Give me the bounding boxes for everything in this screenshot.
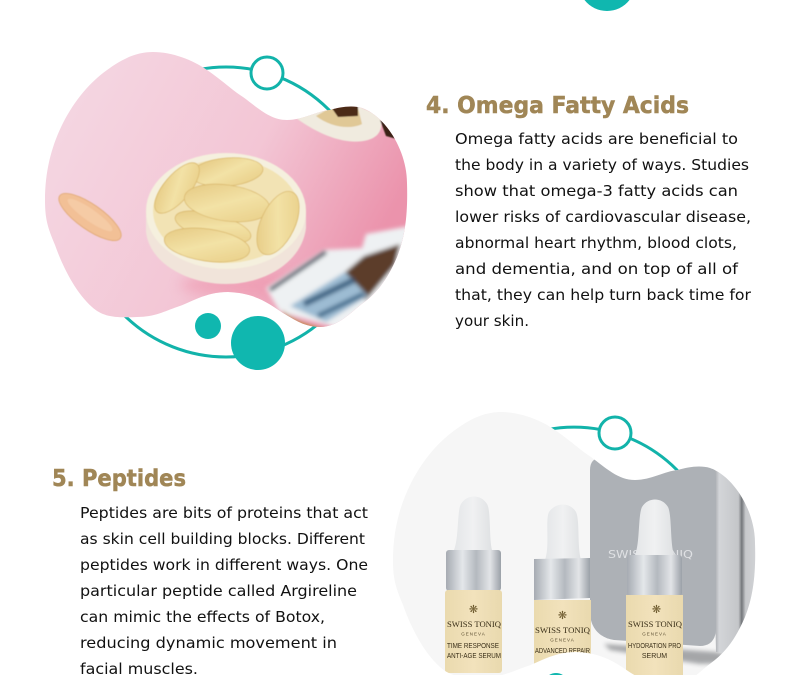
- bottle three: GENEVA: [642, 632, 667, 636]
- small teal dot: [195, 313, 221, 339]
- metal tin: SWISS TONIQ: [608, 548, 693, 561]
- body text: omega fatty acids: show that omega-3 fatty acids can: [455, 182, 738, 200]
- decorative ring behind photo: [429, 427, 719, 572]
- body text: omega fatty acids: [455, 130, 752, 330]
- body text: peptides: [80, 504, 368, 675]
- body text: omega fatty acids: and dementia, and on top of all of: [455, 260, 739, 278]
- body text: omega fatty acids: the body in a variety of ways. Studies: [455, 156, 749, 174]
- body text: omega fatty acids: lower risks of cardiovascular disease,: [455, 208, 751, 226]
- blurred bottle at lower right: [266, 226, 410, 332]
- metal tin: [590, 458, 760, 664]
- small teal dot: [549, 673, 563, 675]
- body text: peptides: can mimic the effects of Botox,: [80, 608, 325, 626]
- bottle one: ANTI-AGE SERUM: [447, 653, 501, 660]
- bottle three: HYDORATION PRO: [628, 643, 681, 650]
- small ring node: [599, 417, 631, 449]
- bottle three: SERUM: [642, 653, 667, 660]
- section 5 image: serum bottles in teal-ringed blob: [385, 405, 765, 675]
- lone capsule on the left: [58, 192, 122, 242]
- bottle three: ❋: [652, 603, 661, 616]
- section 4 image: omega capsules in teal-ringed blob: [40, 45, 415, 370]
- capsules in the dish: [154, 156, 300, 263]
- body text: omega fatty acids: abnormal heart rhythm, blood clots,: [455, 234, 737, 252]
- body text: peptides: particular peptide called Argireline: [80, 582, 357, 600]
- body text: peptides: Peptides are bits of proteins that act: [80, 504, 368, 522]
- photo: capsules on pink surface: [40, 45, 415, 335]
- heading: 5. Peptides: 5. Peptides: [52, 464, 186, 492]
- heading: 4. Omega Fatty Acids: 4. Omega Fatty Acids: [426, 91, 689, 119]
- body text: peptides: reducing dynamic movement in: [80, 634, 337, 652]
- bottle one: ❋: [469, 603, 478, 616]
- small ring node: [251, 57, 283, 89]
- teal circle cropped at the top edge: [584, 0, 630, 11]
- bottle one: TIME RESPONSE: [447, 643, 499, 650]
- bottle two: ❋: [558, 609, 567, 622]
- bottle three: [626, 500, 683, 675]
- body text: omega fatty acids: that, they can help turn back time for: [455, 286, 752, 304]
- bottle one: [445, 496, 502, 673]
- body text: peptides: peptides work in different ways. One: [80, 556, 368, 574]
- large teal dot: [231, 316, 285, 370]
- bottle two: ADVANCED REPAIR: [535, 648, 590, 655]
- body text: omega fatty acids: your skin.: [455, 312, 529, 330]
- decorative ring behind photo: [81, 67, 371, 357]
- bottle three: SWISS TONIQ: [628, 619, 682, 629]
- bottle one: SWISS TONIQ: [447, 619, 501, 629]
- bottle two: [534, 504, 591, 675]
- bottle two: GENEVA: [550, 638, 575, 642]
- photo: serum bottles and tin: [385, 405, 765, 675]
- dish lid: [146, 153, 306, 284]
- bottle one: GENEVA: [461, 632, 486, 636]
- body text: peptides: as skin cell building blocks. Different: [80, 530, 365, 548]
- body text: omega fatty acids: Omega fatty acids are beneficial to: [455, 130, 738, 148]
- jar at upper right: [297, 106, 395, 142]
- bottle two: SWISS TONIQ: [535, 625, 590, 635]
